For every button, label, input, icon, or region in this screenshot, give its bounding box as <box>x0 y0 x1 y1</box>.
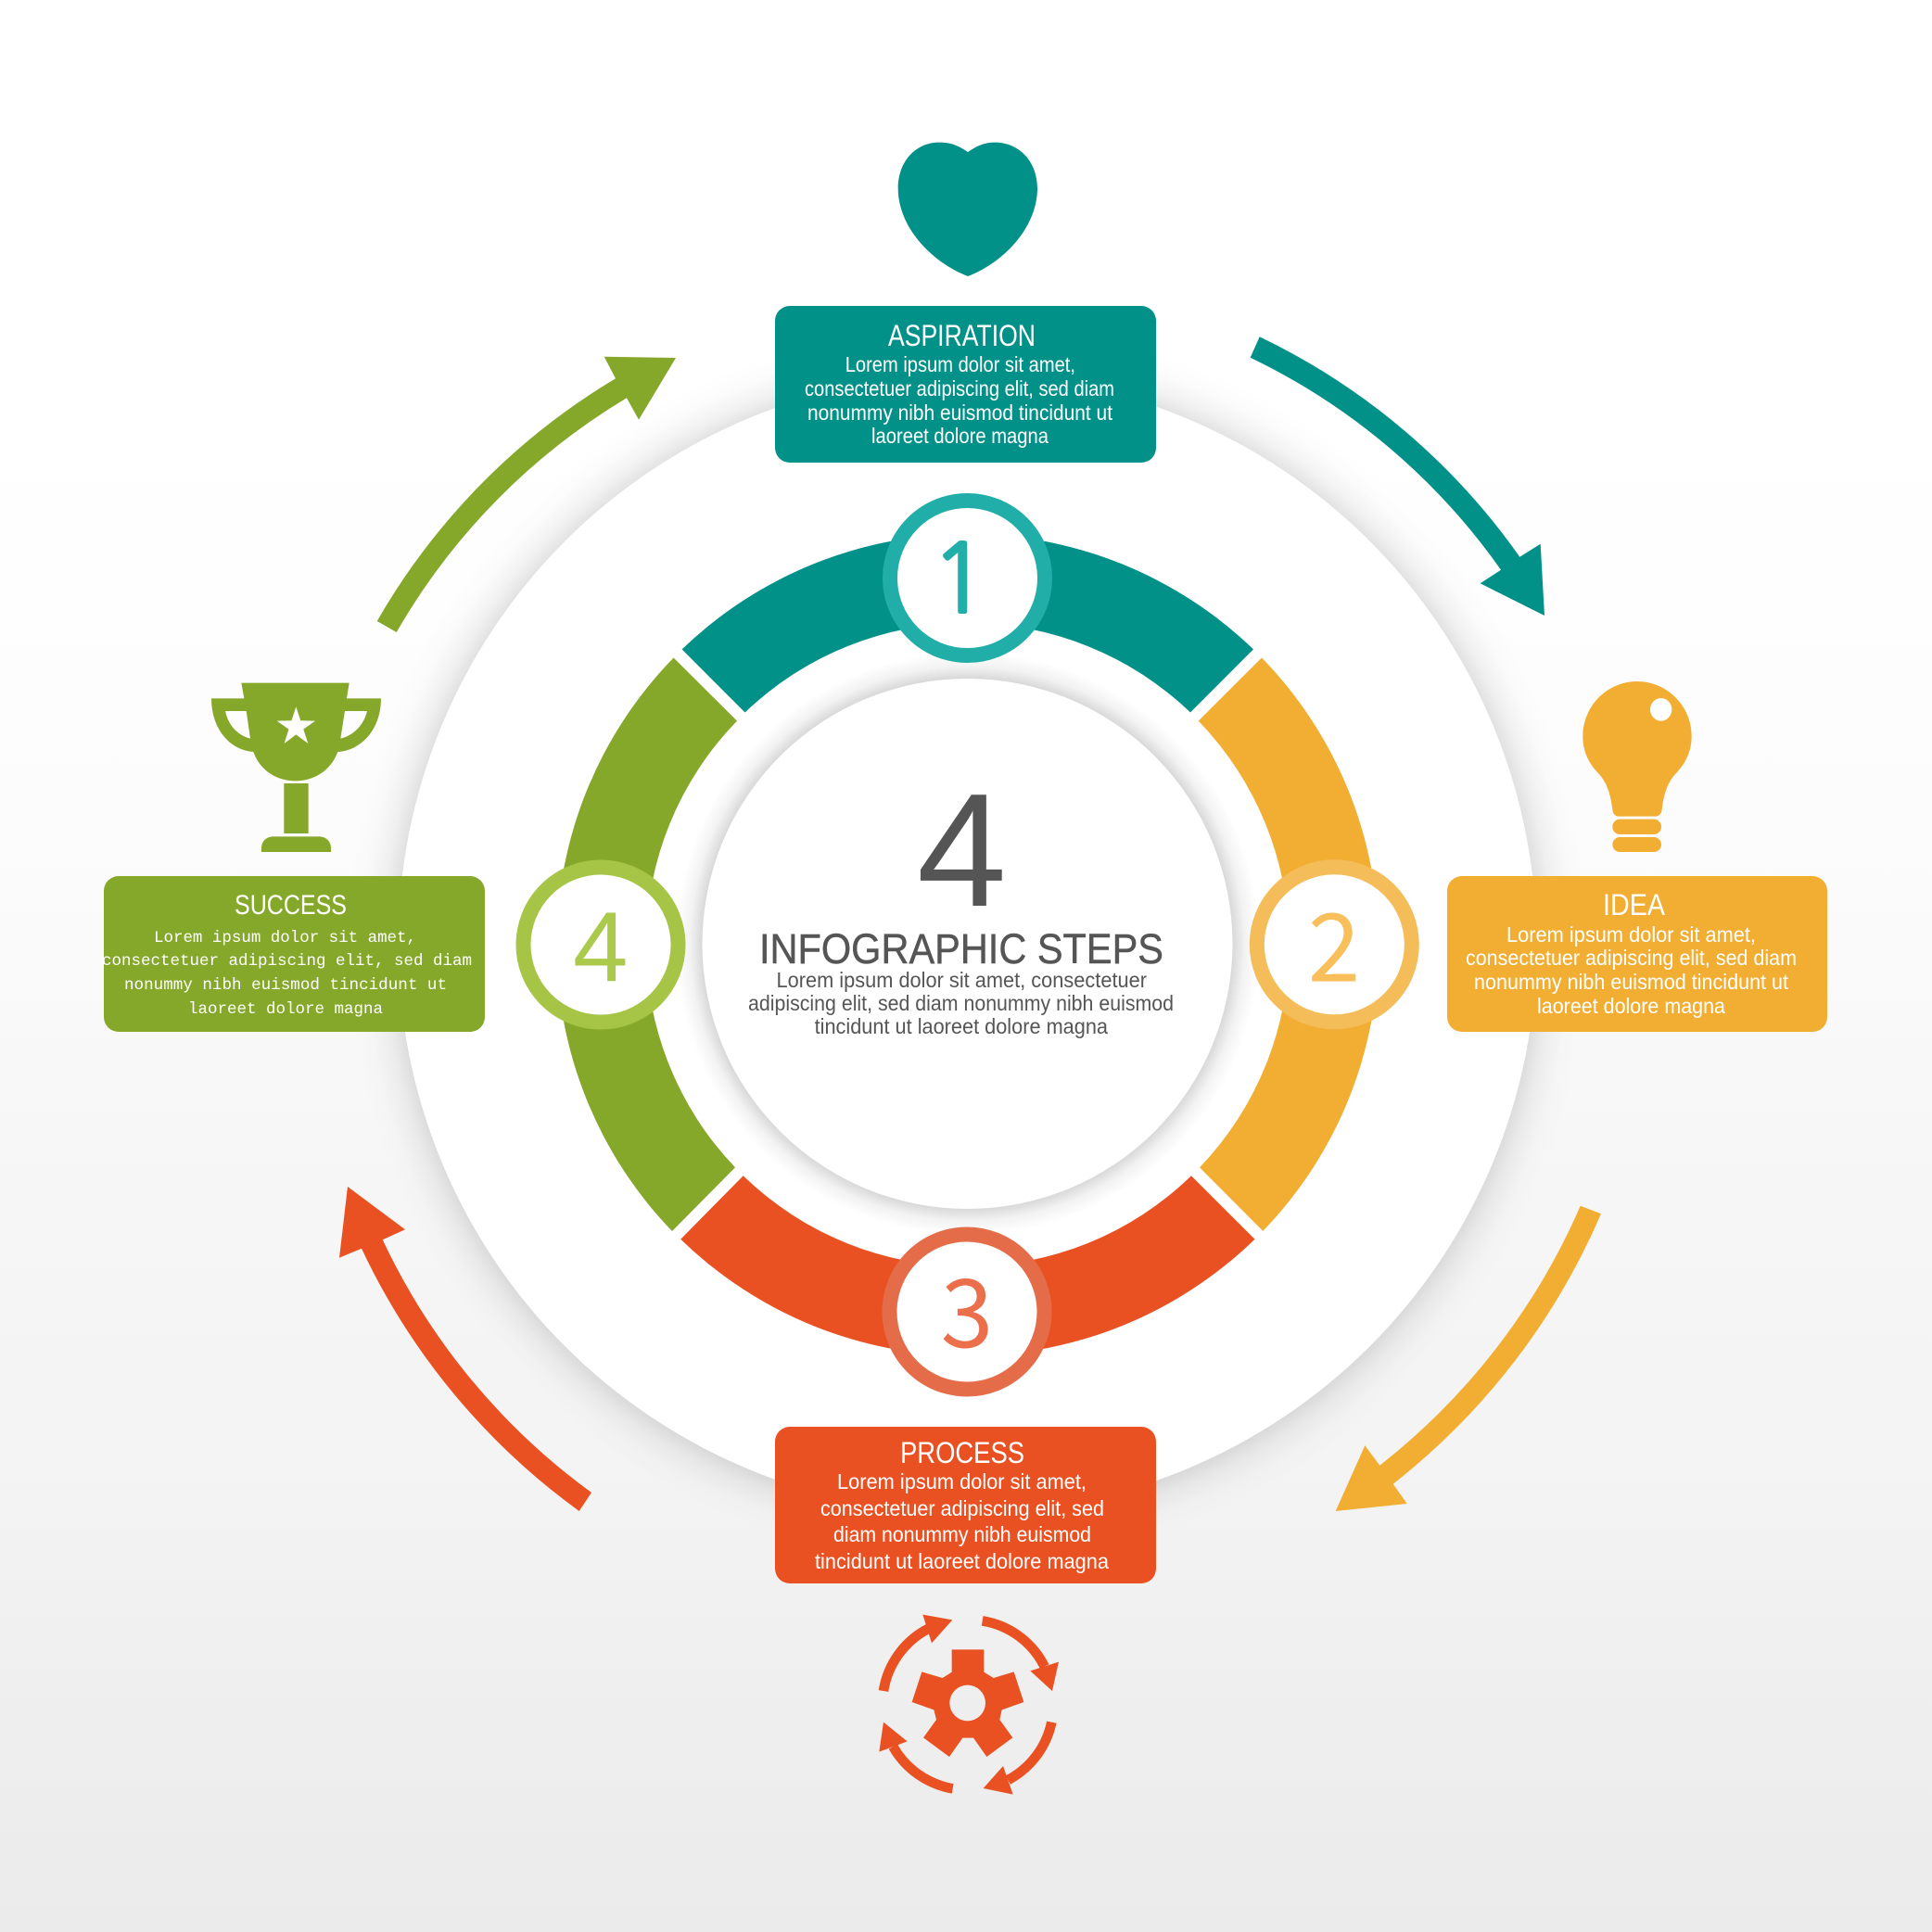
icon: light bulb <box>1582 681 1692 852</box>
aspiration body: consectetuer adipiscing elit, sed diam <box>805 376 1114 400</box>
aspiration heading: ASPIRATION <box>888 319 1036 352</box>
icon: gear with circular arrows <box>879 1615 1059 1795</box>
icon: trophy <box>211 683 381 852</box>
success heading: SUCCESS <box>235 890 347 921</box>
icon: heart <box>898 143 1037 276</box>
ring segment: green <box>556 658 737 1231</box>
ring segment: teal <box>682 534 1253 712</box>
ring segment: yellow <box>1199 658 1379 1231</box>
success body: consectetuer adipiscing elit, sed diam <box>102 952 472 971</box>
success body: nonummy nibh euismod tincidunt ut <box>124 976 447 995</box>
center circle <box>675 652 1259 1236</box>
panel: aspiration <box>775 306 1156 463</box>
center description: Lorem ipsum dolor sit amet, consectetuer <box>777 968 1147 992</box>
idea body <box>1466 922 1797 1018</box>
success body: Lorem ipsum dolor sit amet, <box>154 929 416 947</box>
success body <box>102 929 472 1019</box>
badge 4: 4 <box>573 891 629 1002</box>
badge 4 <box>523 868 679 1022</box>
success body: laoreet dolore magna <box>188 1000 383 1019</box>
badge 3 <box>890 1235 1044 1389</box>
arrow: teal <box>1251 337 1544 616</box>
process body <box>815 1469 1109 1573</box>
idea body: Lorem ipsum dolor sit amet, <box>1506 922 1756 947</box>
ring segment: orange <box>680 1176 1255 1355</box>
badge 3: 3 <box>941 1239 993 1375</box>
arrow: yellow <box>1336 1206 1601 1511</box>
panel: process <box>775 1427 1156 1583</box>
center description <box>748 968 1174 1038</box>
panel: success <box>102 876 485 1032</box>
badge 2 <box>1257 867 1412 1022</box>
process body: tincidunt ut laoreet dolore magna <box>815 1549 1109 1573</box>
center heading: INFOGRAPHIC STEPS <box>759 925 1163 972</box>
aspiration body: laoreet dolore magna <box>871 424 1049 448</box>
badge 2: 2 <box>1308 873 1360 1009</box>
process body: Lorem ipsum dolor sit amet, <box>837 1469 1087 1493</box>
process heading: PROCESS <box>900 1436 1024 1469</box>
arrow: orange <box>339 1187 591 1511</box>
aspiration body: nonummy nibh euismod tincidunt ut <box>807 400 1113 425</box>
badge 1: 1 <box>931 531 988 626</box>
badge 1 <box>890 501 1045 655</box>
process body: diam nonummy nibh euismod <box>833 1522 1091 1546</box>
idea heading: IDEA <box>1603 888 1666 922</box>
idea body: nonummy nibh euismod tincidunt ut <box>1474 970 1789 994</box>
process body: consectetuer adipiscing elit, sed <box>820 1496 1104 1520</box>
center description: adipiscing elit, sed diam nonummy nibh euismod <box>748 991 1174 1015</box>
panel: idea <box>1447 876 1827 1032</box>
idea body: laoreet dolore magna <box>1537 994 1725 1018</box>
large white circle with shadow <box>347 323 1589 1565</box>
center description: tincidunt ut laoreet dolore magna <box>815 1014 1108 1038</box>
big number four: 4 <box>917 759 1007 940</box>
arrow: green <box>377 357 676 632</box>
aspiration body <box>805 352 1114 448</box>
aspiration body: Lorem ipsum dolor sit amet, <box>845 352 1075 376</box>
idea body: consectetuer adipiscing elit, sed diam <box>1466 946 1797 970</box>
